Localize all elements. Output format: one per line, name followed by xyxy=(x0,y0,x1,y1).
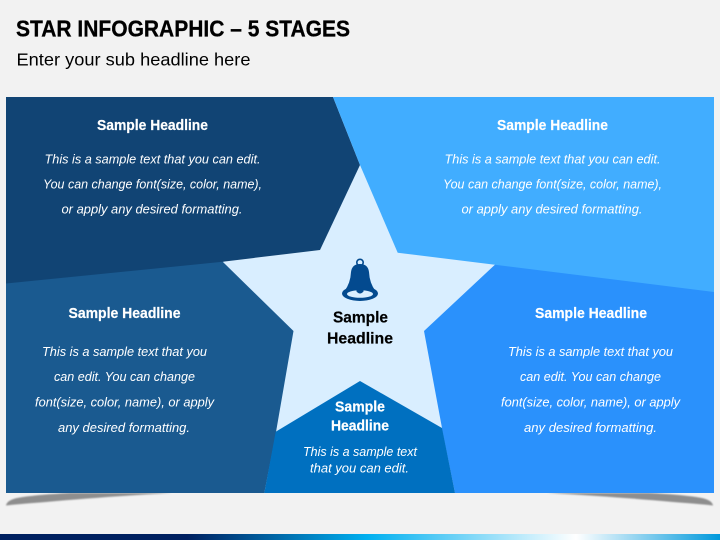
headline: lower left: Sample Headline xyxy=(68,306,180,322)
icon: bell xyxy=(342,259,378,301)
body text: lower left xyxy=(35,344,215,435)
body text: lower right: can edit. You can change xyxy=(520,369,661,384)
star headline: Sample xyxy=(333,310,388,327)
panel: top left xyxy=(6,97,360,284)
subtitle: Enter your sub headline here xyxy=(16,50,250,70)
body text: top right: This is a sample text that you can edit. xyxy=(444,152,660,166)
body text: bottom centre: This is a sample text xyxy=(303,444,418,459)
footer gradient bar xyxy=(0,534,720,540)
panel: star centre xyxy=(223,164,496,432)
shadow: left xyxy=(6,493,172,506)
title: STAR INFOGRAPHIC – 5 STAGES xyxy=(16,16,350,42)
body text: top right xyxy=(443,152,662,216)
panel: lower left xyxy=(6,260,296,493)
body text: top right: You can change font(size, color, name), xyxy=(443,176,662,192)
body text: lower right xyxy=(501,344,681,435)
body text: lower left: can edit. You can change xyxy=(54,369,195,384)
body text: lower right: font(size, color, name), or apply xyxy=(501,394,681,410)
headline: top left: Sample Headline xyxy=(97,118,208,134)
body text: top right: or apply any desired formatting. xyxy=(462,202,642,216)
body text: lower right: This is a sample text that you xyxy=(508,344,673,359)
headline: lower right: Sample Headline xyxy=(535,306,647,322)
headline: bottom centre: Sample xyxy=(335,400,385,416)
body text: lower right: any desired formatting. xyxy=(524,420,657,435)
body text: lower left: This is a sample text that you xyxy=(42,344,207,359)
star headline: Headline xyxy=(327,330,393,348)
panel: lower right xyxy=(422,262,714,493)
headline: bottom centre: Headline xyxy=(331,419,389,435)
body text: top left: You can change font(size, color, name), xyxy=(43,176,262,192)
panel: bottom centre xyxy=(264,381,455,493)
body text: bottom centre: that you can edit. xyxy=(310,461,409,476)
body text: bottom centre xyxy=(303,444,418,476)
body text: top left xyxy=(43,152,262,216)
star headline xyxy=(327,310,393,348)
body text: lower left: any desired formatting. xyxy=(58,420,190,435)
body text: lower left: font(size, color, name), or apply xyxy=(35,394,215,410)
headline: top right: Sample Headline xyxy=(497,118,608,134)
body text: top left: This is a sample text that you can edit. xyxy=(44,152,260,166)
panel: top right xyxy=(333,97,714,292)
shadow: right xyxy=(547,493,713,506)
body text: top left: or apply any desired formatting. xyxy=(62,202,242,216)
headline: bottom centre xyxy=(331,400,389,435)
